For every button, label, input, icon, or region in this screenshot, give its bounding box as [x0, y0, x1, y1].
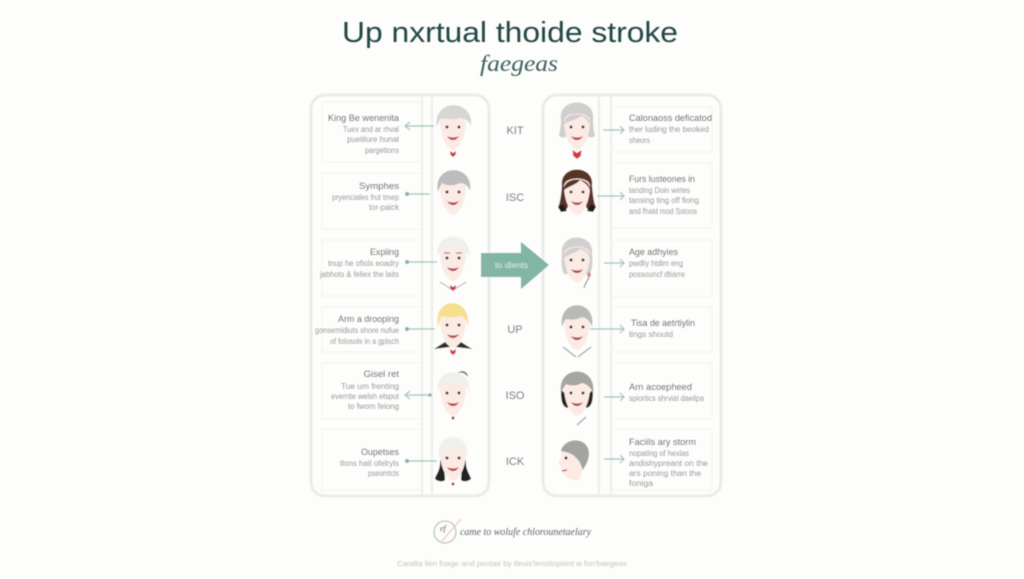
right card 2: and fhald mod Sstoos [629, 207, 697, 216]
left card 3 [319, 240, 421, 296]
right arrow 1 [603, 126, 624, 134]
left card 3: jabhots & feliex the laits [319, 270, 399, 279]
footer note: Caralta lien fuage and pontae by tleuis'lenstinpiont w fon'baegeas [397, 559, 627, 568]
category labels: ISC [506, 192, 524, 204]
right portrait 3 [562, 238, 592, 288]
right card 2 [612, 163, 712, 228]
title: Up nxrtual thoide stroke [342, 17, 678, 49]
left card 4: Arm a drooping [338, 314, 399, 325]
left card 6: Oupetses [361, 447, 399, 458]
right card 1: ther luding the beoked [629, 125, 709, 134]
left portrait 1 [437, 105, 471, 157]
right card 4: tings shoutd [629, 330, 673, 339]
left card 1 [322, 102, 421, 162]
right portrait 2 [558, 170, 596, 215]
left arrow 3 [405, 260, 437, 264]
left arrow 1 [405, 122, 434, 130]
right arrow 2 [597, 192, 624, 200]
right arrow 6 [604, 455, 624, 463]
left card 1: pargetions [365, 146, 399, 155]
right card 2: tanding Doin wirtes [629, 186, 690, 195]
panel: left column [311, 95, 489, 496]
left arrow 4 [405, 327, 435, 331]
right portrait 4 [562, 305, 592, 357]
left card 2 [322, 173, 421, 229]
right card 4: Tisa de aetrtiylin [631, 318, 695, 329]
right card 4 [612, 307, 712, 352]
left card 2: Symphes [359, 181, 399, 192]
category labels: UP [507, 324, 523, 336]
central arrow: to dlents [495, 260, 528, 270]
left card 6: pseomtcls [368, 469, 399, 478]
category labels: KIT [506, 125, 524, 137]
left card 4 [315, 307, 421, 352]
left card 5: to fwom feiong [348, 402, 399, 411]
right portrait 6: profile [558, 440, 589, 481]
right card 5: spiortics shrvial daeilpa [629, 394, 705, 403]
right card 5: Arn acoepheed [629, 382, 692, 393]
category labels: ISO [506, 390, 525, 402]
right card 1: sheors [629, 136, 650, 145]
left portrait 5 [438, 371, 469, 420]
right card 2: Furs lusteones in [629, 174, 695, 185]
left card 4: gonsemidiuts shore nufue [315, 326, 399, 335]
subtitle: faegeas [480, 51, 558, 76]
left card 4: of folosols in a gplsch [330, 337, 399, 346]
left card 3: tnup he ofiolx eoadry [328, 259, 399, 268]
left card 1: King Be wenenita [328, 113, 400, 124]
right card 6: foniga [629, 479, 654, 488]
right card 1: Calonaoss deficatod [629, 113, 712, 124]
right card 6 [612, 429, 712, 490]
central arrow [481, 242, 549, 289]
right card 3: Age adhyies [629, 247, 678, 258]
footer logo icon [434, 519, 461, 543]
left card 5: Gisel ret [364, 369, 399, 380]
left card 2: pryenciales frut tmep [332, 193, 400, 202]
right portrait 1 [559, 102, 595, 159]
left portrait 3 [438, 237, 469, 291]
right arrow 3 [604, 259, 624, 267]
right card 3: possouncf dtiarre [629, 270, 685, 279]
category labels: ICK [506, 456, 525, 468]
right card 6: Faciils ary storm [629, 437, 696, 448]
left card 3: Expiing [370, 247, 399, 258]
left card 2: tor-palck [369, 203, 399, 212]
right card 1 [612, 107, 712, 152]
right arrow 5 [604, 393, 624, 401]
left card 6 [322, 429, 421, 490]
footer logo icon: ef [440, 524, 448, 533]
left card 1: Tuex and ar rhval [343, 125, 399, 134]
right card 6: andishypreant on the [629, 459, 708, 468]
right portrait 5 [561, 372, 593, 425]
panel: right column [543, 95, 721, 496]
left arrow 2 [405, 192, 430, 196]
left portrait 6 [435, 437, 471, 486]
right card 6: nopating of hexlas [629, 449, 689, 458]
right card 5 [612, 363, 712, 419]
footer tagline: came to wolufe chlorounetaelary [460, 527, 592, 538]
right card 3: pwdliy htdim eng [629, 259, 683, 268]
left card 6: tlons hait ofelryls [340, 459, 399, 468]
right card 3 [612, 240, 712, 297]
right arrow 4 [590, 325, 624, 333]
left card 1: puetilure hunal [347, 135, 399, 144]
left arrow 6 [405, 459, 437, 463]
left card 5: Tue um frenting [341, 382, 399, 391]
left arrow 5 [405, 391, 432, 399]
category labels [506, 125, 525, 468]
left portrait 4 [434, 303, 472, 355]
left portrait 2 [437, 170, 470, 215]
left card 5: evernte welsh elsput [331, 392, 400, 401]
left card 5 [322, 363, 421, 419]
right card 6: ars poning than the [629, 469, 701, 478]
right card 2: tansing ting off fiong [629, 196, 699, 205]
